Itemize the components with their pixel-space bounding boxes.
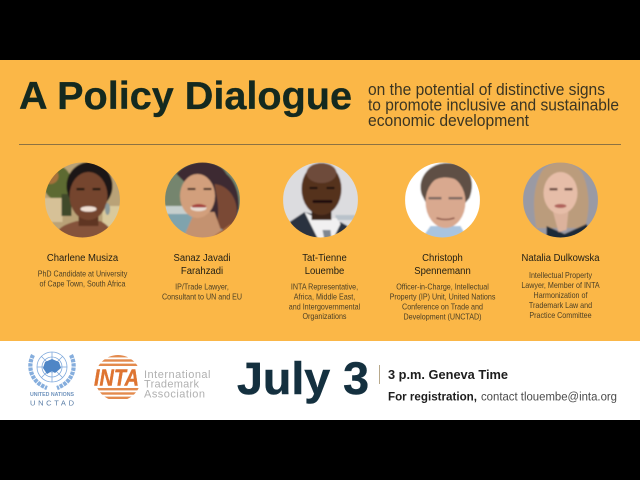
speaker: Tat-Tienne Louembe: Organizations xyxy=(302,312,347,321)
speaker: Christoph Spennemann: Officer-in-Charge, Intellectual xyxy=(396,282,489,292)
speaker: Tat-Tienne Louembe: and Intergovernmental xyxy=(289,302,360,312)
portrait: Tat-Tienne Louembe xyxy=(282,162,358,240)
speaker: Sanaz Javadi Farahzadi: IP/Trade Lawyer, xyxy=(175,282,229,292)
portrait: Charlene Musiza xyxy=(42,162,120,240)
speaker: Christoph Spennemann: Property (IP) Unit, United Nations xyxy=(390,292,496,302)
subtitle: on the potential of distinctive signs xyxy=(368,81,605,99)
speaker: Sanaz Javadi Farahzadi: Sanaz Javadi xyxy=(174,253,230,264)
speaker: Natalia Dulkowska: Practice Committee xyxy=(529,311,592,320)
speaker: Natalia Dulkowska: Lawyer, Member of INTA xyxy=(521,281,600,290)
logo: INTA: INTA xyxy=(94,364,139,390)
speaker: Sanaz Javadi Farahzadi: Consultant to UN and EU xyxy=(162,292,242,302)
speaker: Tat-Tienne Louembe: INTA Representative, xyxy=(291,282,358,292)
logo: INTA: Association xyxy=(144,388,205,400)
speaker: Natalia Dulkowska xyxy=(521,253,600,320)
date: July 3 xyxy=(237,353,369,404)
speaker: Charlene Musiza: PhD Candidate at University xyxy=(38,269,128,279)
panel: yellow speakers banner xyxy=(0,60,640,341)
title: A Policy Dialogue xyxy=(19,75,352,118)
speaker: Sanaz Javadi Farahzadi: Farahzadi xyxy=(181,266,223,277)
speaker: Tat-Tienne Louembe: Africa, Middle East, xyxy=(294,292,355,302)
subtitle xyxy=(368,81,619,130)
speaker: Natalia Dulkowska: Harmonization of xyxy=(534,291,588,300)
speaker: Tat-Tienne Louembe: Louembe xyxy=(305,266,345,277)
portrait: Natalia Dulkowska xyxy=(522,162,598,240)
speaker: Natalia Dulkowska: Natalia Dulkowska xyxy=(521,253,600,264)
logo: INTA: Trademark xyxy=(144,378,200,390)
subtitle: to promote inclusive and sustainable xyxy=(368,96,619,114)
speaker: Charlene Musiza: of Cape Town, South Africa xyxy=(40,279,126,289)
logo: UN emblem and UNCTAD xyxy=(30,352,75,408)
speaker: Natalia Dulkowska: Intellectual Property xyxy=(529,271,592,280)
speaker: Charlene Musiza xyxy=(38,253,128,289)
registration contact: contact tlouembe@inta.org xyxy=(481,390,617,404)
event time: 3 p.m. Geneva Time xyxy=(388,367,508,382)
portrait: Christoph Spennemann xyxy=(404,162,480,240)
logo: UN emblem and UNCTAD: UNITED NATIONS xyxy=(30,392,75,398)
logo: INTA xyxy=(94,355,210,400)
speaker: Charlene Musiza: Charlene Musiza xyxy=(47,253,119,264)
portrait: Sanaz Javadi Farahzadi xyxy=(164,162,240,240)
speaker: Christoph Spennemann: Christoph xyxy=(422,253,463,264)
speaker: Christoph Spennemann: Spennemann xyxy=(414,266,471,277)
speaker: Tat-Tienne Louembe xyxy=(289,253,360,321)
subtitle: economic development xyxy=(368,112,529,130)
logo: UN emblem and UNCTAD: UNCTAD xyxy=(30,398,75,408)
speaker: Christoph Spennemann: Conference on Trade and xyxy=(402,302,483,312)
logo: INTA: International xyxy=(144,369,210,381)
panel: white footer band xyxy=(0,341,640,420)
registration contact: For registration, xyxy=(388,390,477,404)
registration contact xyxy=(388,390,617,404)
speaker: Tat-Tienne Louembe: Tat-Tienne xyxy=(302,253,347,264)
speaker: Christoph Spennemann xyxy=(390,253,496,322)
speaker: Natalia Dulkowska: Trademark Law and xyxy=(529,301,592,310)
speaker: Christoph Spennemann: Development (UNCTAD) xyxy=(404,312,482,322)
speaker: Sanaz Javadi Farahzadi xyxy=(162,253,242,302)
